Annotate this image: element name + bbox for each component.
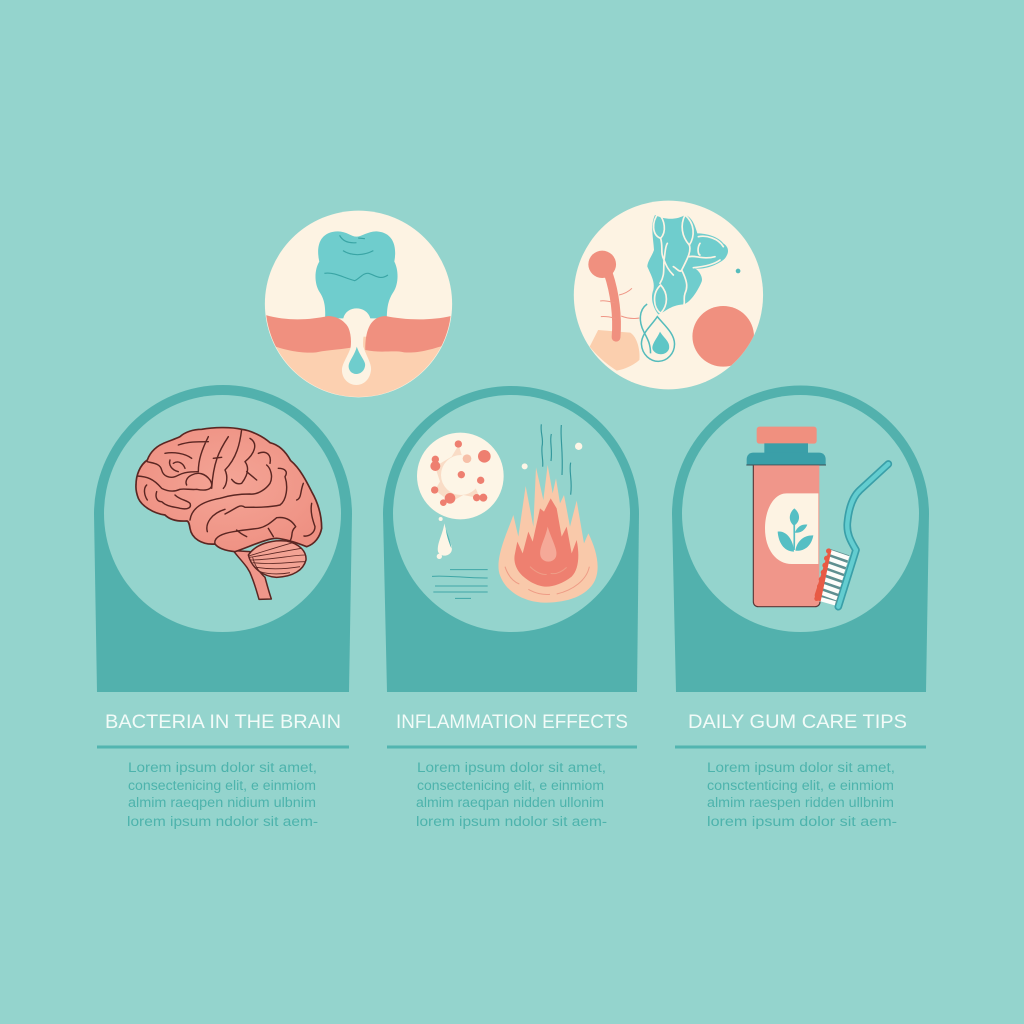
arch card — [383, 386, 639, 692]
heading: bacteria in the brain: BACTERIA IN THE BRAIN — [105, 711, 341, 733]
text block: bacteria in the brain — [127, 760, 318, 829]
text block: daily gum care tips: almim raespen ridden ullbnim — [707, 795, 894, 810]
text block: bacteria in the brain: Lorem ipsum dolor sit amet, — [128, 760, 317, 775]
text block: daily gum care tips: Lorem ipsum dolor sit amet, — [707, 760, 895, 775]
heading: daily gum care tips: DAILY GUM CARE TIPS — [688, 711, 907, 733]
icon circle — [393, 395, 630, 632]
panel: inflammation effects — [383, 386, 639, 692]
icon circle — [682, 395, 919, 632]
text block: daily gum care tips: consctenticing elit, e einmiom — [707, 778, 894, 793]
illustration: tooth and gum circle — [264, 210, 452, 398]
text block: inflammation effects: consectenicing elit, e einmiom — [417, 778, 604, 793]
illustration: nerve and bacteria circle — [574, 201, 763, 389]
text block: inflammation effects: almim raeqpan nidden ullonim — [416, 795, 604, 810]
icon: toothpaste bottle and toothbrush — [746, 427, 888, 607]
infographic canvas — [94, 200, 929, 829]
text block: inflammation effects: Lorem ipsum dolor sit amet, — [417, 760, 606, 775]
heading: inflammation effects: INFLAMMATION EFFECTS — [396, 711, 628, 733]
text block: bacteria in the brain: lorem ipsum ndolor sit aem- — [127, 814, 318, 829]
arch card — [94, 385, 352, 692]
text block: bacteria in the brain: consectenicing elit, e einmiom — [128, 778, 316, 793]
icon: brain — [136, 428, 322, 599]
arch card — [672, 386, 929, 692]
icon circle — [104, 395, 341, 632]
text block: daily gum care tips: lorem ipsum dolor sit aem- — [707, 814, 897, 829]
text block: inflammation effects: lorem ipsum ndolor sit aem- — [416, 814, 607, 829]
panel: bacteria in the brain — [94, 385, 352, 692]
text block: bacteria in the brain: almim raeqpen nidium ulbnim — [128, 795, 316, 810]
panel: daily gum care tips — [672, 386, 929, 692]
text block: inflammation effects — [416, 760, 607, 829]
text block: daily gum care tips — [707, 760, 897, 829]
icon: bacteria cell and inflammation flame — [417, 424, 598, 603]
